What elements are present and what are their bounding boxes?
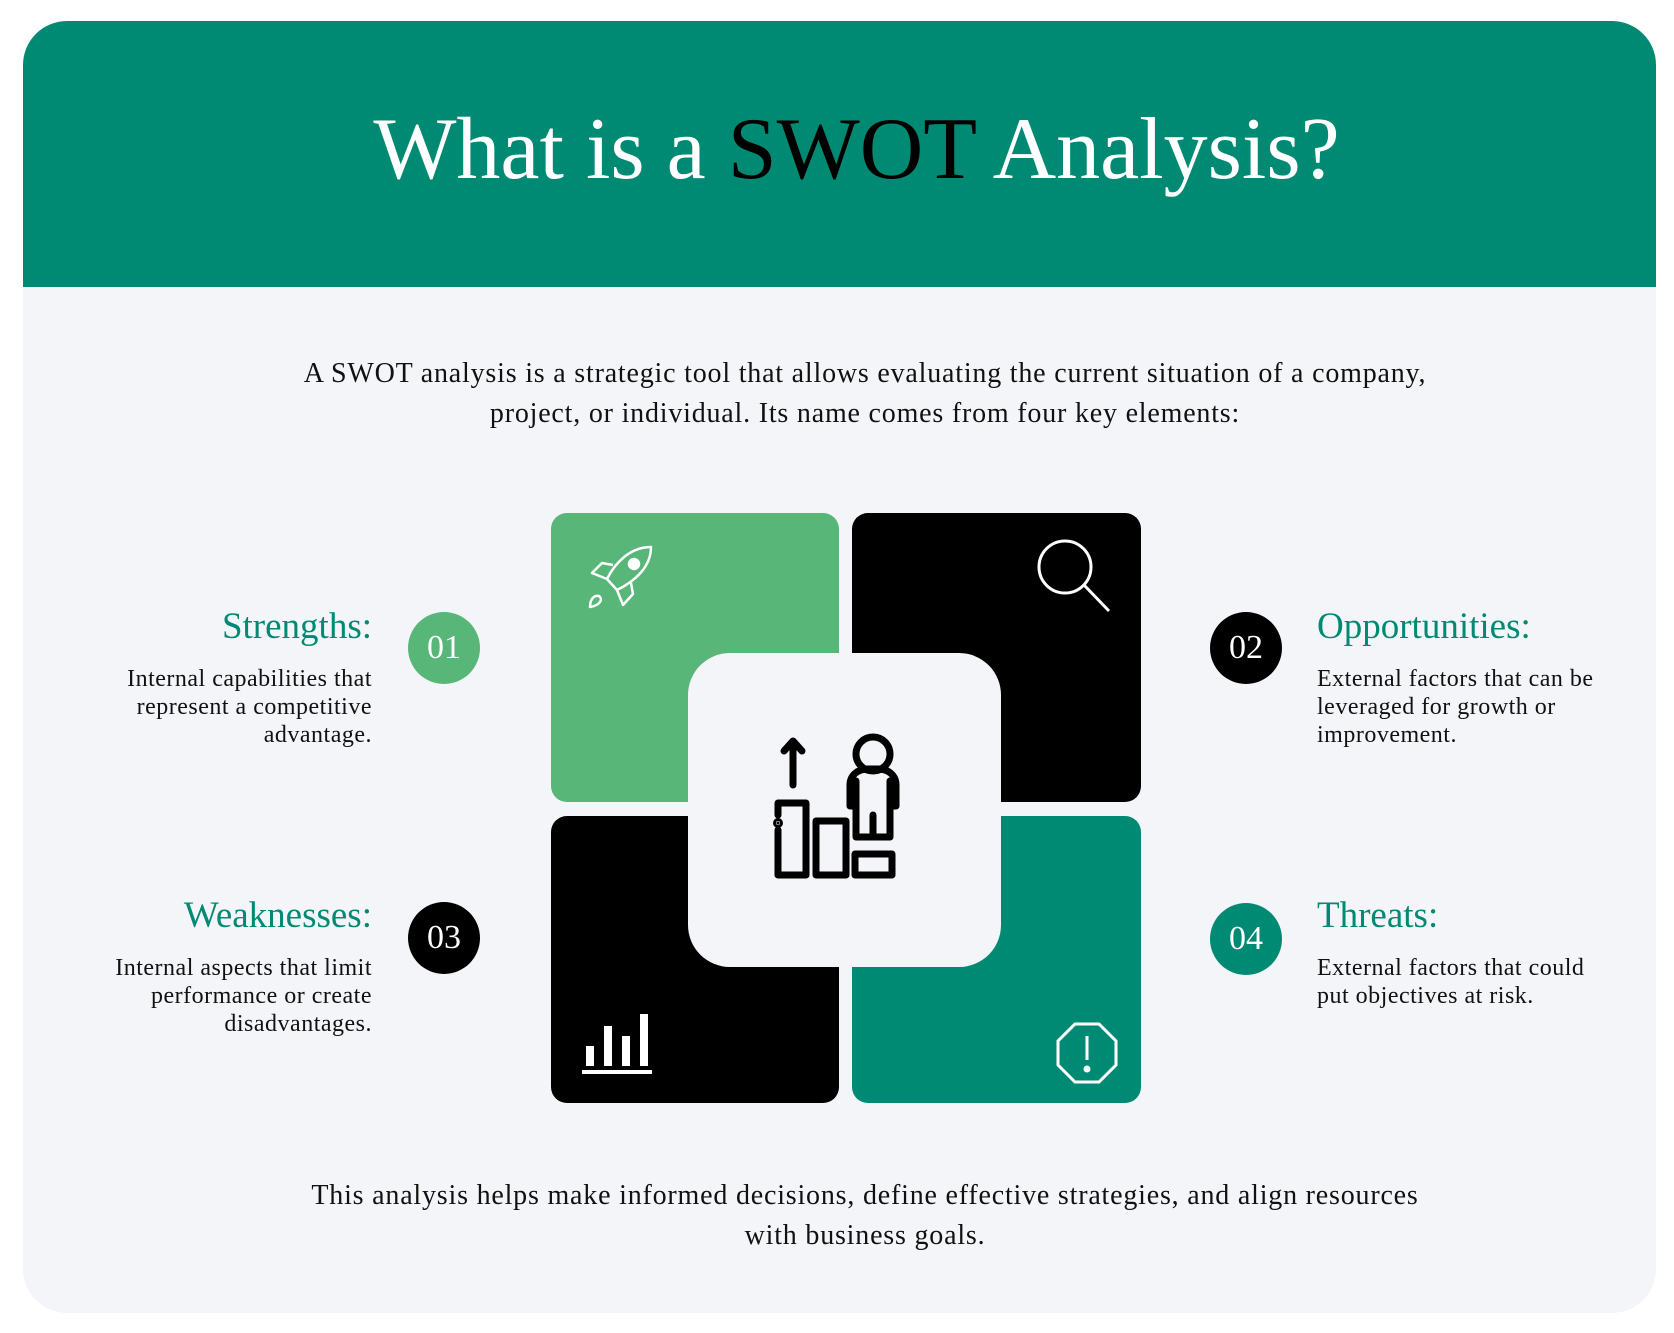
circle 01 — [408, 612, 480, 684]
opportunities text: improvement. — [1317, 722, 1457, 748]
icon: bar chart — [582, 1014, 652, 1074]
circle 02 — [1210, 612, 1282, 684]
weaknesses text: Internal aspects that limit — [115, 955, 372, 981]
weaknesses text: Weaknesses: — [184, 895, 372, 936]
circle 04: 04 — [1229, 920, 1263, 957]
opportunities text: External factors that can be — [1317, 666, 1594, 692]
weaknesses text: performance or create — [151, 983, 372, 1009]
threats text: Threats: — [1317, 895, 1438, 936]
weaknesses text: disadvantages. — [224, 1011, 372, 1037]
header band — [23, 21, 1656, 287]
threats text: External factors that could — [1317, 955, 1584, 981]
threats text — [1317, 895, 1584, 1009]
circle 01: 01 — [427, 629, 461, 666]
tile: weaknesses — [551, 816, 839, 1103]
weaknesses text — [115, 895, 372, 1037]
title: What is a SWOT Analysis? — [373, 101, 1340, 198]
circle 02: 02 — [1229, 629, 1263, 666]
icon: warning octagon — [1056, 1022, 1118, 1084]
intro text: project, or individual. Its name comes from four key elements: — [490, 398, 1240, 429]
closing text — [311, 1180, 1419, 1251]
icon: rocket — [588, 546, 652, 608]
closing text: This analysis helps make informed decisions, define effective strategies, and align resources — [311, 1180, 1419, 1211]
intro text: A SWOT analysis is a strategic tool that allows evaluating the current situation of a company, — [304, 358, 1426, 389]
opportunities text: Opportunities: — [1317, 606, 1531, 647]
tile: opportunities — [852, 513, 1141, 802]
closing text: with business goals. — [745, 1220, 985, 1251]
strengths text: represent a competitive — [137, 694, 372, 720]
strengths text: advantage. — [264, 722, 372, 748]
opportunities text: leveraged for growth or — [1317, 694, 1556, 720]
circle 03 — [408, 902, 480, 974]
tile: threats — [852, 816, 1141, 1103]
opportunities text — [1317, 606, 1594, 748]
center square with icon — [688, 653, 1001, 967]
icon: magnifier — [1038, 540, 1110, 612]
strengths text — [127, 606, 372, 748]
strengths text: Strengths: — [222, 606, 372, 647]
intro text — [304, 358, 1426, 429]
circle 04 — [1210, 903, 1282, 975]
icon: person on podium — [773, 734, 900, 878]
circle 03: 03 — [427, 919, 461, 956]
strengths text: Internal capabilities that — [127, 666, 372, 692]
threats text: put objectives at risk. — [1317, 983, 1534, 1009]
tile: strengths — [551, 513, 839, 802]
